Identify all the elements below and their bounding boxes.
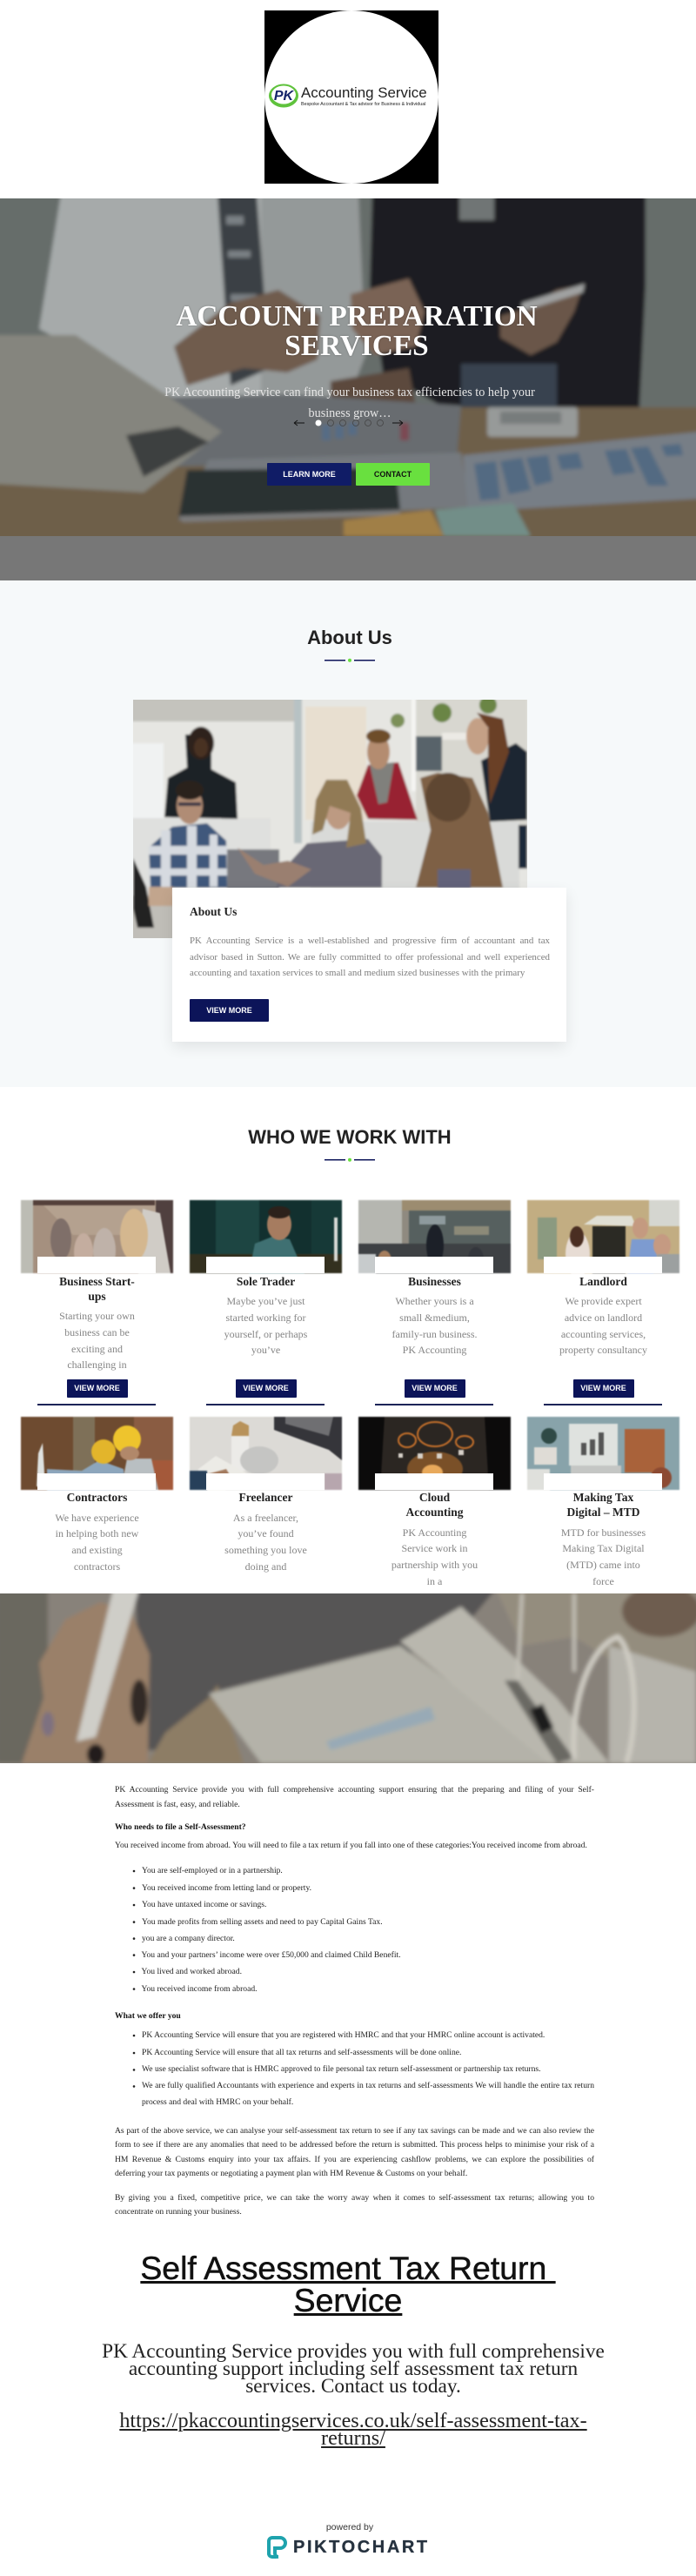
text: advice on landlord (565, 1311, 642, 1324)
about card (172, 888, 566, 1042)
white label (206, 1473, 325, 1490)
title (405, 1491, 463, 1519)
card: businesses (358, 1199, 512, 1405)
text: in helping both new (56, 1527, 138, 1540)
button (235, 1379, 296, 1398)
photo (526, 1416, 680, 1491)
title: Business Start- (59, 1275, 135, 1288)
website link: https://pkaccountingservices.co.uk/self-assessment-tax- (119, 2409, 587, 2432)
title (567, 1491, 640, 1519)
paragraph: fixed price: concentrate on running your business. (115, 2207, 242, 2217)
text (59, 1310, 135, 1371)
paragraph: fixed price: By giving you a fixed, competitive price, we can take the worry away when it comes to self-assessment tax returns; allowing you to (115, 2193, 594, 2203)
about card heading: About Us (190, 905, 237, 918)
hero subtitle: PK Accounting Service can find your business tax efficiencies to help your (164, 386, 535, 399)
hero title: ACCOUNT PREPARATION (176, 300, 538, 332)
card: contractors (20, 1416, 174, 1573)
logo PK mark (269, 84, 298, 108)
text: small &medium, (399, 1311, 470, 1324)
closing paragraph: accounting support including self assessment tax return (129, 2358, 578, 2380)
text: Starting your own (59, 1310, 135, 1322)
hero photo (0, 198, 696, 536)
paragraph: review service: deferring your tax payments or negotiating a payment plan with HM Revenue & Customs on your behalf. (115, 2169, 467, 2178)
about card text: advisor based in Sutton. We are fully committed to offer professional and well experienced (190, 952, 550, 963)
list: who needs: You have untaxed income or savings. (142, 1900, 266, 1909)
list: what we offer: PK Accounting Service will ensure that all tax returns and self-assessments will be done online. (142, 2048, 461, 2057)
photo (189, 1416, 343, 1491)
text (561, 1526, 646, 1587)
white label (375, 1473, 493, 1490)
text (224, 1511, 307, 1573)
text (392, 1295, 477, 1356)
card: business start-ups (20, 1199, 174, 1405)
paragraph: review service: form to see if there are any anomalies that need to be addressed before the return is submitted. This process helps to minimise your risk of a (115, 2140, 594, 2150)
about section (0, 580, 696, 1087)
text: MTD for businesses (561, 1526, 646, 1539)
list: who needs: You lived and worked abroad. (141, 1967, 242, 1976)
white label (37, 1257, 156, 1273)
list: what we offer: PK Accounting Service will ensure that you are registered with HMRC and that your HMRC online account is activated. (142, 2030, 545, 2040)
list: what we offer: We are fully qualified Accountants with experience and experts in tax returns and self-assessments We will handle the entire tax return (142, 2081, 594, 2090)
text: Service work in (402, 1542, 467, 1554)
text: partnership with you (392, 1559, 478, 1571)
list: what we offer (132, 2030, 594, 2107)
card: cloud accounting (357, 1415, 512, 1587)
text: in a (427, 1575, 442, 1587)
learn more button: LEARN MORE (283, 470, 336, 479)
text: yourself, or perhaps (224, 1328, 307, 1340)
button (404, 1379, 465, 1398)
text: something you love (224, 1544, 307, 1556)
rule (375, 1404, 493, 1405)
text: doing and (245, 1560, 286, 1573)
text (559, 1295, 647, 1356)
hero subtitle (164, 386, 535, 420)
learn more button (267, 463, 351, 486)
intro paragraph line 2: Assessment is fast, easy, and reliable. (115, 1800, 240, 1809)
categories line: You received income from abroad. You will need to file a tax return if you fall into one of these categories:You received income from abroad. (115, 1841, 587, 1850)
hero subtitle: business grow… (308, 406, 391, 420)
big title: Self Assessment Tax Return Service (140, 2250, 556, 2318)
piktochart icon (266, 2536, 287, 2559)
white label (37, 1473, 156, 1490)
closing paragraph: PK Accounting Service provides you with full comprehensive (102, 2340, 605, 2363)
about card text: PK Accounting Service is a well-established and progressive firm of accountant and tax (190, 936, 550, 946)
text (224, 1295, 307, 1356)
who we work with heading: WHO WE WORK WITH (248, 1126, 452, 1148)
about team photo (133, 700, 527, 938)
list: who needs (132, 1866, 401, 1994)
title: Digital – MTD (567, 1506, 640, 1519)
rule (37, 1404, 156, 1405)
about card text (190, 936, 550, 978)
text: We provide expert (565, 1295, 642, 1307)
piktochart logo (266, 2536, 433, 2559)
website link (87, 2412, 619, 2448)
title (59, 1275, 135, 1303)
white label (544, 1257, 662, 1273)
card: making tax digital (526, 1416, 680, 1587)
title: Businesses (408, 1275, 461, 1288)
photo (20, 1199, 174, 1274)
text: (MTD) came into (566, 1559, 640, 1571)
title: Contractors (67, 1491, 127, 1504)
button: VIEW MORE (580, 1384, 626, 1392)
photo (20, 1416, 174, 1491)
logo name: Accounting Service (301, 84, 427, 101)
photo (358, 1199, 512, 1274)
about view more button: VIEW MORE (206, 1006, 252, 1015)
photo (526, 1199, 680, 1274)
slider controls (294, 419, 404, 426)
button: VIEW MORE (412, 1384, 458, 1392)
text: exciting and (71, 1342, 123, 1354)
website link: returns/ (321, 2426, 385, 2450)
hero title: SERVICES (284, 330, 429, 362)
subheading: what we offer: What we offer you (115, 2011, 181, 2021)
paragraph: review service (115, 2126, 594, 2178)
text: family-run business. (392, 1328, 477, 1340)
list: who needs: You received income from letting land or property. (142, 1883, 311, 1893)
logo tagline: Bespoke Accountant & Tax advisor for Business & Individual (301, 102, 425, 107)
card: freelancer (189, 1416, 343, 1573)
text: property consultancy (559, 1344, 647, 1356)
who we work with divider (325, 1157, 375, 1162)
list: who needs: You and your partners’ income were over £50,000 and claimed Child Benefit. (141, 1950, 401, 1960)
text: and existing (71, 1544, 123, 1556)
text: Whether yours is a (395, 1295, 474, 1307)
logo white circle (264, 10, 438, 184)
about card text: accounting and taxation services to small and medium sized businesses with the primary (190, 968, 525, 978)
contact button: CONTACT (374, 470, 412, 479)
logo (264, 10, 438, 184)
paragraph: review service: As part of the above service, we can analyse your self-assessment tax return to see if any tax savings can be made and we can also review the (115, 2126, 594, 2136)
intro paragraph: PK Accounting Service provide you with full comprehensive accounting support ensuring that the preparing and filing of your Self- (115, 1785, 594, 1794)
title: Making Tax (573, 1491, 633, 1504)
list: who needs: You are self-employed or in a partnership. (142, 1866, 283, 1875)
photo (357, 1415, 512, 1492)
title: Freelancer (239, 1491, 292, 1504)
paragraph: fixed price (115, 2193, 594, 2217)
article text (115, 1785, 594, 2217)
list: who needs: you are a company director. (142, 1934, 235, 1943)
list: what we offer: We use specialist software that is HMRC approved to file personal tax return self-assessment or partnership tax returns. (142, 2064, 541, 2074)
button (572, 1379, 633, 1398)
text: Making Tax Digital (562, 1542, 645, 1554)
button: VIEW MORE (74, 1384, 120, 1392)
title: ups (88, 1290, 106, 1303)
white label (544, 1473, 662, 1490)
white label (375, 1257, 493, 1273)
about heading: About Us (307, 627, 392, 648)
powered by: powered by (326, 2522, 373, 2532)
photo (189, 1199, 343, 1274)
button: VIEW MORE (243, 1384, 289, 1392)
text: you’ve found (238, 1527, 294, 1540)
rule (206, 1404, 325, 1405)
text: accounting services, (561, 1328, 646, 1340)
paragraph: review service: HM Revenue & Customs enquiry into your tax affairs. If you are experiencing cashflow problems, we can explore the possibilities of (115, 2155, 594, 2164)
contact button (356, 463, 430, 486)
title: Accounting (405, 1506, 463, 1519)
text: Maybe you’ve just (226, 1295, 304, 1307)
title: Cloud (419, 1491, 450, 1504)
white label (206, 1257, 325, 1273)
text: We have experience (55, 1511, 139, 1523)
logo PK mark: PK (274, 89, 295, 104)
text: PK Accounting (403, 1526, 466, 1539)
title: Sole Trader (237, 1275, 295, 1288)
button (66, 1379, 127, 1398)
hero title (176, 300, 538, 362)
text: As a freelancer, (233, 1511, 298, 1523)
piktochart wordmark: PIKTOCHART (293, 2538, 430, 2557)
rule (544, 1404, 662, 1405)
about divider (325, 658, 375, 662)
about view more button (190, 999, 269, 1022)
closing paragraph (102, 2340, 605, 2398)
text (392, 1526, 478, 1587)
closing paragraph: services. Contact us today. (245, 2375, 461, 2398)
subheading: who needs: Who needs to file a Self-Assessment? (115, 1822, 246, 1832)
text: force (592, 1575, 614, 1587)
list: who needs: You received income from abroad. (141, 1984, 258, 1994)
text: started working for (226, 1311, 305, 1324)
text (55, 1511, 139, 1573)
list: who needs: You made profits from selling assets and need to pay Capital Gains Tax. (142, 1917, 383, 1927)
list: what we offer: process and deal with HMRC on your behalf. (142, 2097, 293, 2107)
card: sole trader (189, 1199, 343, 1405)
title: Landlord (579, 1275, 627, 1288)
band photo (0, 1593, 696, 1763)
text: challenging in (67, 1358, 127, 1371)
text: you’ve (251, 1344, 280, 1356)
hero panel (0, 198, 696, 580)
text: contractors (74, 1560, 120, 1573)
card: landlord (526, 1199, 680, 1405)
text: PK Accounting (403, 1344, 466, 1356)
text: business can be (64, 1326, 130, 1338)
